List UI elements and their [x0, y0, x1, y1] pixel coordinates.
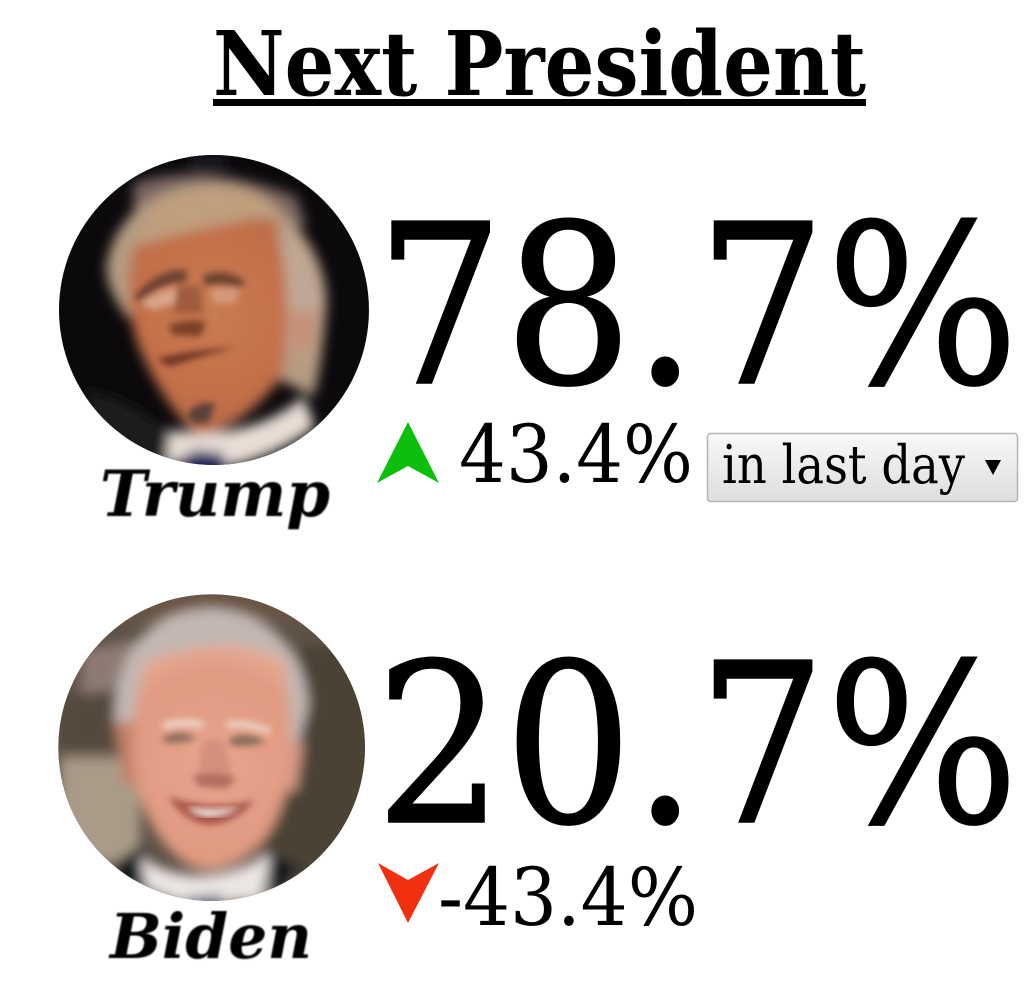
portrait label: Biden: Biden	[108, 900, 312, 973]
change: Trump: 43.4%	[459, 408, 693, 501]
change: Biden: -43.4%	[438, 851, 698, 944]
portrait label: Trump: Trump	[100, 457, 330, 532]
dropdown: in last day: in last day	[722, 435, 965, 496]
portrait: Trump	[53, 150, 377, 473]
icon: red down arrow	[378, 863, 439, 923]
icon: green up arrow	[377, 422, 439, 483]
portrait: Biden	[53, 590, 377, 913]
title: Next President	[213, 11, 866, 116]
